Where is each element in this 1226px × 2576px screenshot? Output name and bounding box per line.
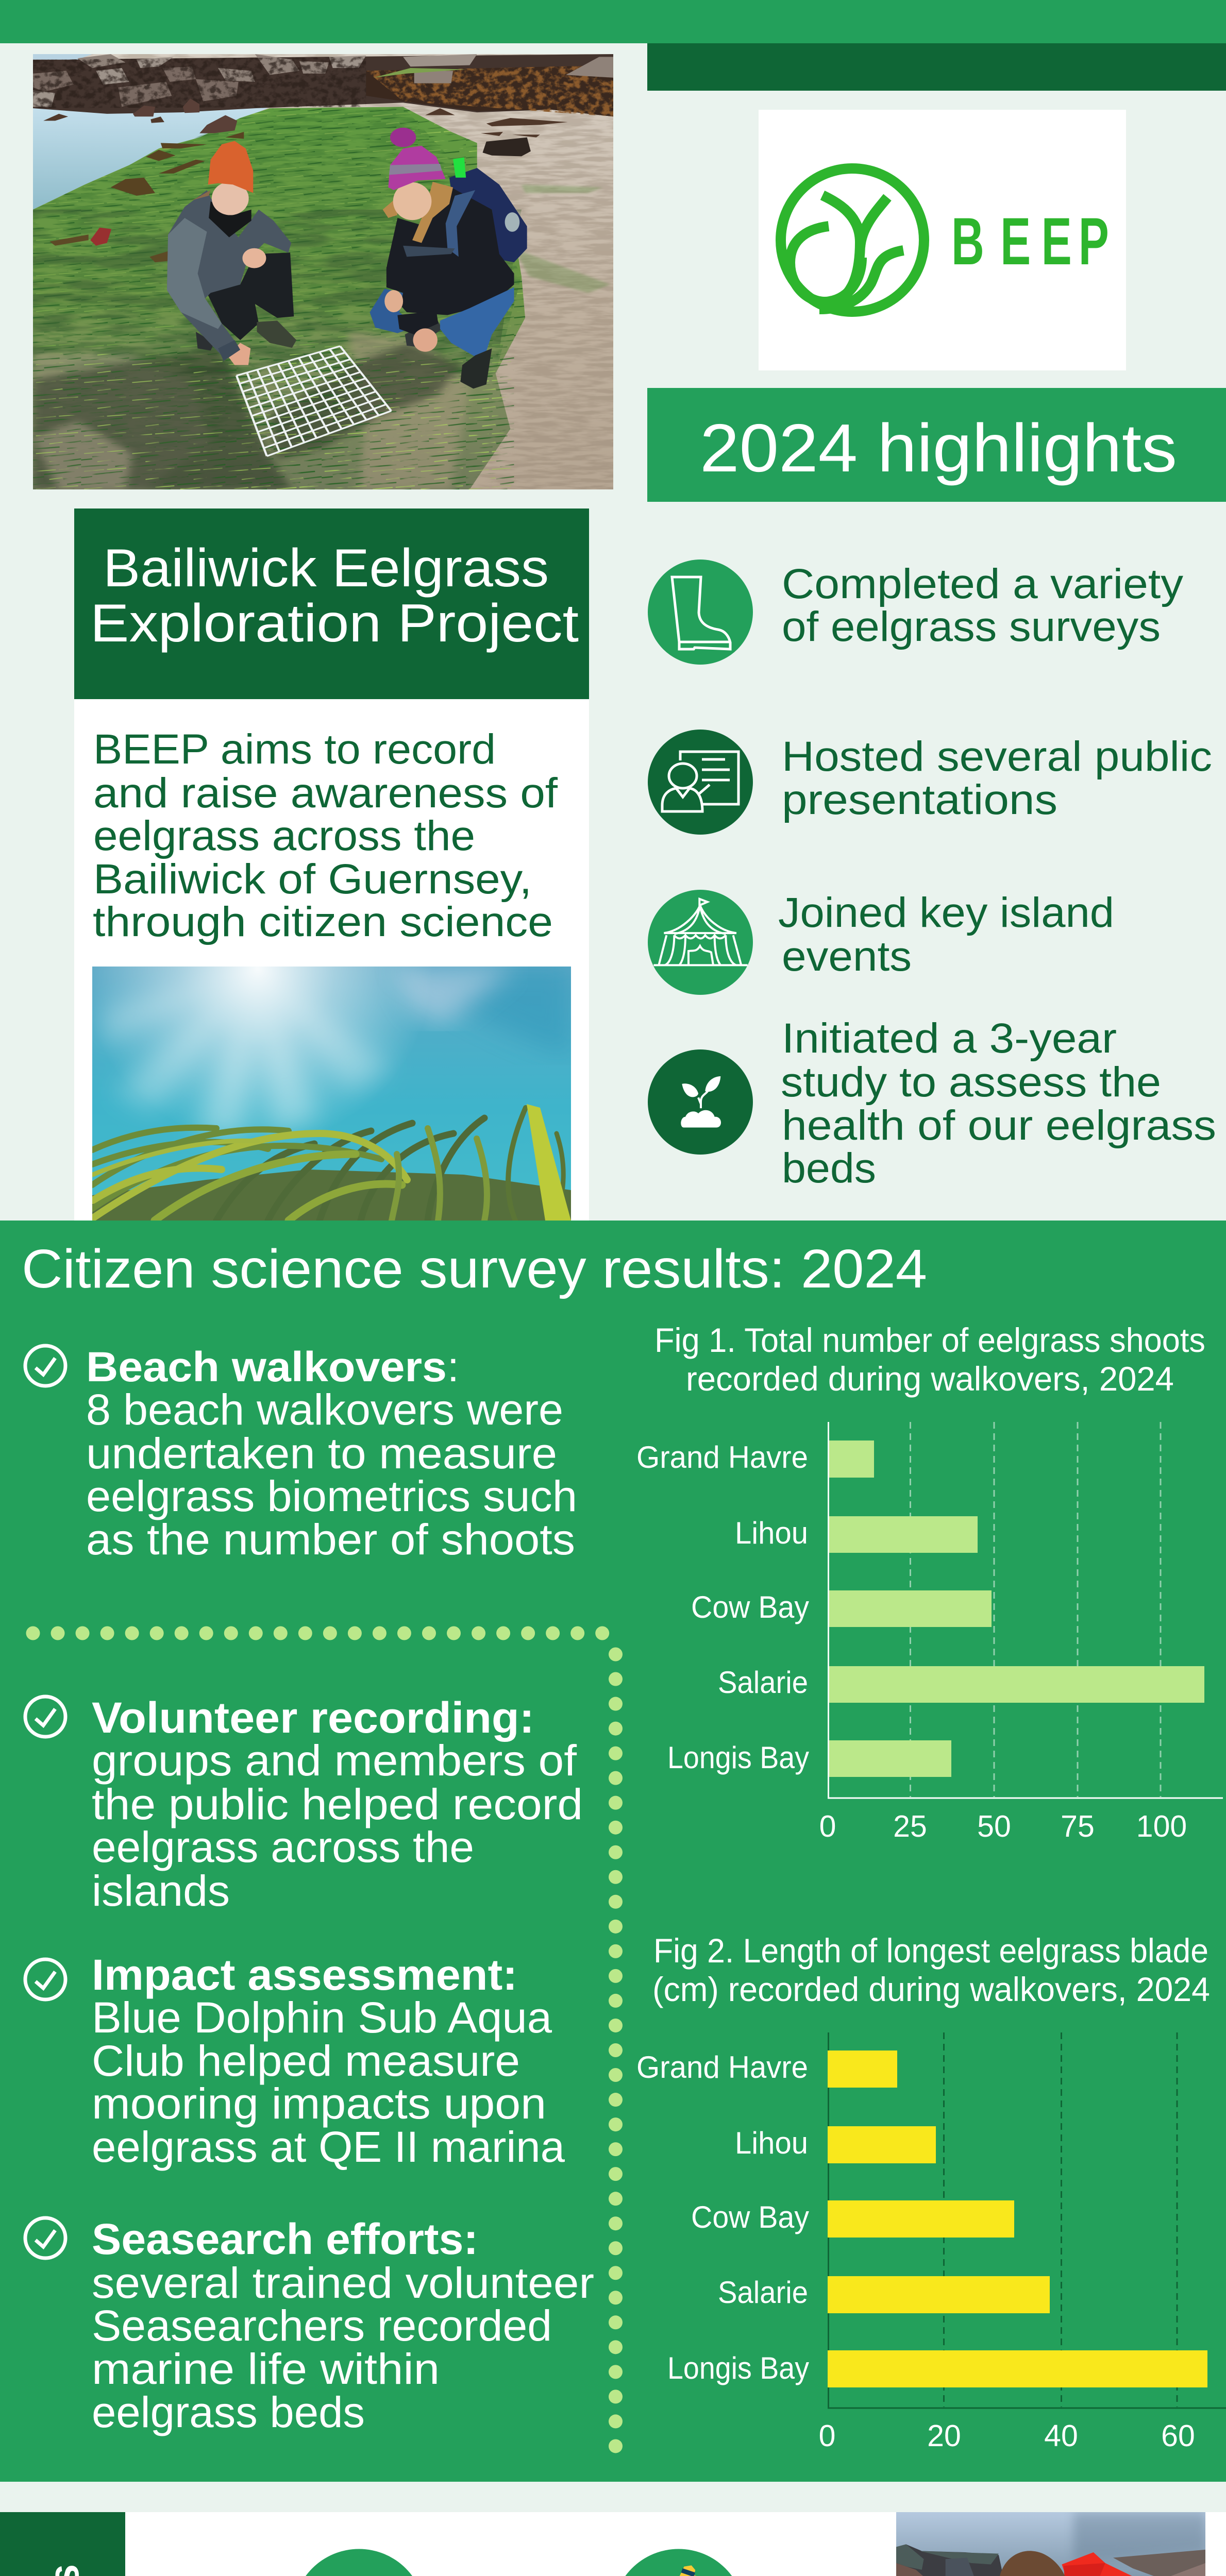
highlight: initiated a 3-year study: Initiated a 3-year — [782, 1015, 1117, 1062]
person left — [167, 141, 296, 365]
icon: microscope — [613, 2549, 745, 2576]
category labels: Grand Havre — [636, 1440, 808, 1475]
highlight: initiated a 3-year study — [648, 1015, 1216, 1192]
item: seasearch efforts: marine life within — [92, 2345, 440, 2393]
highlight: completed a variety of eelgrass surveys: of eelgrass surveys — [782, 603, 1161, 650]
project aim text — [93, 726, 558, 945]
logo mark — [781, 168, 924, 312]
activity: gifted funds — [551, 2549, 809, 2576]
item: seasearch efforts: Seasearch efforts: — [92, 2215, 478, 2263]
project aim text: and raise awareness of — [93, 770, 558, 817]
photo: two volunteers on the eelgrass bed — [33, 54, 613, 489]
item: volunteer recording: islands — [92, 1867, 230, 1915]
value axis labels: 25 — [893, 1809, 927, 1843]
item: beach walkovers: undertaken to measure — [86, 1429, 557, 1478]
highlight: initiated a 3-year study: health of our eelgrass — [782, 1102, 1216, 1149]
icon: seedling — [648, 1049, 753, 1155]
icon: check circle — [25, 1959, 65, 1999]
top dark green bar — [647, 43, 1226, 91]
item: seasearch efforts: eelgrass beds — [92, 2388, 365, 2436]
icon: check circle — [25, 2218, 65, 2258]
item: beach walkovers: eelgrass biometrics such — [86, 1472, 577, 1520]
highlight: hosted public presentations: presentations — [782, 776, 1057, 823]
activity: joint events — [221, 2549, 494, 2576]
item: beach walkovers: Beach walkovers — [86, 1344, 447, 1391]
item: volunteer recording: the public helped record — [92, 1780, 583, 1828]
icon: presenter at board — [648, 730, 753, 835]
highlight: joined key island events: events — [782, 933, 912, 980]
icon: marquee tent — [648, 890, 753, 995]
highlight: completed a variety of eelgrass surveys — [648, 560, 1183, 665]
bars — [828, 1440, 1204, 1777]
category labels: Longis Bay — [667, 1740, 809, 1775]
logo panel: BEEP — [759, 110, 1126, 370]
category labels: Salarie — [718, 2275, 808, 2310]
project title block: Exploration Project — [90, 594, 579, 653]
highlight: joined key island events — [648, 889, 1114, 995]
item: beach walkovers: as the number of shoots — [86, 1515, 575, 1564]
value axis labels: 60 — [1161, 2419, 1195, 2453]
item: volunteer recording: groups and members of — [92, 1736, 577, 1785]
project aim text: BEEP aims to record — [93, 726, 496, 773]
value axis labels: 20 — [927, 2419, 961, 2453]
item: beach walkovers: : — [447, 1344, 459, 1391]
highlight: hosted public presentations: Hosted several public — [782, 733, 1212, 780]
project aim text: eelgrass across the — [93, 812, 475, 859]
seaweed — [111, 132, 244, 196]
bar chart: Fig 1 total shoots — [636, 1321, 1223, 1843]
rocks — [896, 2544, 1006, 2576]
value axis labels: 100 — [1136, 1809, 1187, 1843]
item: impact assessment: eelgrass at QE II marina — [92, 2123, 565, 2171]
category labels: Grand Havre — [636, 2050, 808, 2084]
value axis labels: 0 — [819, 1809, 836, 1843]
side bar: extra activities — [0, 2512, 125, 2576]
chart title: Fig 1. Total number of eelgrass shoots — [654, 1321, 1205, 1359]
value axis labels: 40 — [1044, 2419, 1078, 2453]
category labels: Cow Bay — [691, 2200, 809, 2234]
item: seasearch efforts: several trained volunteer — [92, 2259, 594, 2307]
category labels: Lihou — [735, 1516, 808, 1550]
item: impact assessment: mooring impacts upon — [92, 2079, 546, 2128]
logo wordmark: BEEP — [951, 204, 1109, 279]
value axis labels: 50 — [977, 1809, 1011, 1843]
highlight: initiated a 3-year study: study to assess the — [781, 1059, 1161, 1106]
project aim text: Bailiwick of Guernsey, — [93, 856, 532, 903]
chart title: recorded during walkovers, 2024 — [686, 1360, 1174, 1398]
chart title: Fig 2. Length of longest eelgrass blade — [653, 1931, 1208, 1970]
item: volunteer recording: Volunteer recording: — [92, 1693, 534, 1742]
category labels: Cow Bay — [691, 1590, 809, 1624]
category labels — [636, 2050, 809, 2385]
item: impact assessment: Blue Dolphin Sub Aqua — [92, 1993, 552, 2042]
chart title — [652, 1931, 1210, 2008]
bar chart: Fig 2 longest blade — [636, 1931, 1226, 2453]
highlight: hosted public presentations — [648, 730, 1212, 835]
icon: check circle — [25, 1346, 65, 1386]
banner: 2024 highlights — [647, 388, 1226, 502]
item: volunteer recording: eelgrass across the — [92, 1823, 474, 1871]
category labels: Salarie — [718, 1665, 808, 1700]
item: impact assessment: Impact assessment: — [92, 1951, 517, 1999]
chart title: (cm) recorded during walkovers, 2024 — [652, 1970, 1210, 2008]
category labels: Lihou — [735, 2126, 808, 2160]
person right — [370, 128, 527, 388]
item: seasearch efforts — [25, 2215, 594, 2436]
item: volunteer recording — [25, 1693, 583, 1915]
bars — [828, 2050, 1207, 2387]
value axis labels: 0 — [819, 2419, 835, 2453]
category labels: Longis Bay — [667, 2351, 809, 2385]
person — [994, 2551, 1184, 2576]
icon: check circle — [25, 1697, 65, 1737]
dotted divider — [33, 1633, 615, 2447]
rocks — [33, 54, 613, 116]
item: impact assessment: Club helped measure — [92, 2037, 520, 2085]
eelgrass blades — [92, 1108, 571, 1221]
banner: 2024 highlights: 2024 highlights — [700, 410, 1177, 486]
value axis labels — [819, 2419, 1195, 2453]
item: impact assessment — [25, 1951, 565, 2171]
top green band — [0, 0, 1226, 43]
photo: volunteer placing quadrat — [896, 2512, 1205, 2576]
highlight: initiated a 3-year study: beds — [782, 1145, 876, 1192]
value axis labels — [819, 1809, 1187, 1843]
icon: wellington boot — [648, 560, 753, 665]
chart title — [654, 1321, 1205, 1398]
item: seasearch efforts: Seasearchers recorded — [92, 2301, 552, 2350]
item: beach walkovers — [25, 1344, 577, 1564]
highlight: joined key island events: Joined key island — [778, 889, 1114, 936]
item: beach walkovers: 8 beach walkovers were — [86, 1385, 563, 1434]
icon: handshake — [293, 2549, 425, 2576]
project title block: Bailiwick Eelgrass — [103, 538, 549, 598]
panel: citizen science survey results — [0, 1221, 1226, 2482]
value axis labels: 75 — [1061, 1809, 1095, 1843]
section heading: Citizen science survey results: 2024 — [22, 1239, 927, 1299]
highlight: completed a variety of eelgrass surveys: Completed a variety — [782, 561, 1183, 607]
project aim text: through citizen science — [93, 899, 553, 945]
panel: project introduction — [74, 509, 589, 1221]
project title block — [74, 509, 589, 699]
quadrat grid — [237, 346, 391, 456]
category labels — [636, 1440, 809, 1775]
photo: underwater eelgrass — [92, 967, 571, 1221]
panel: extra activities background — [125, 2512, 1226, 2576]
